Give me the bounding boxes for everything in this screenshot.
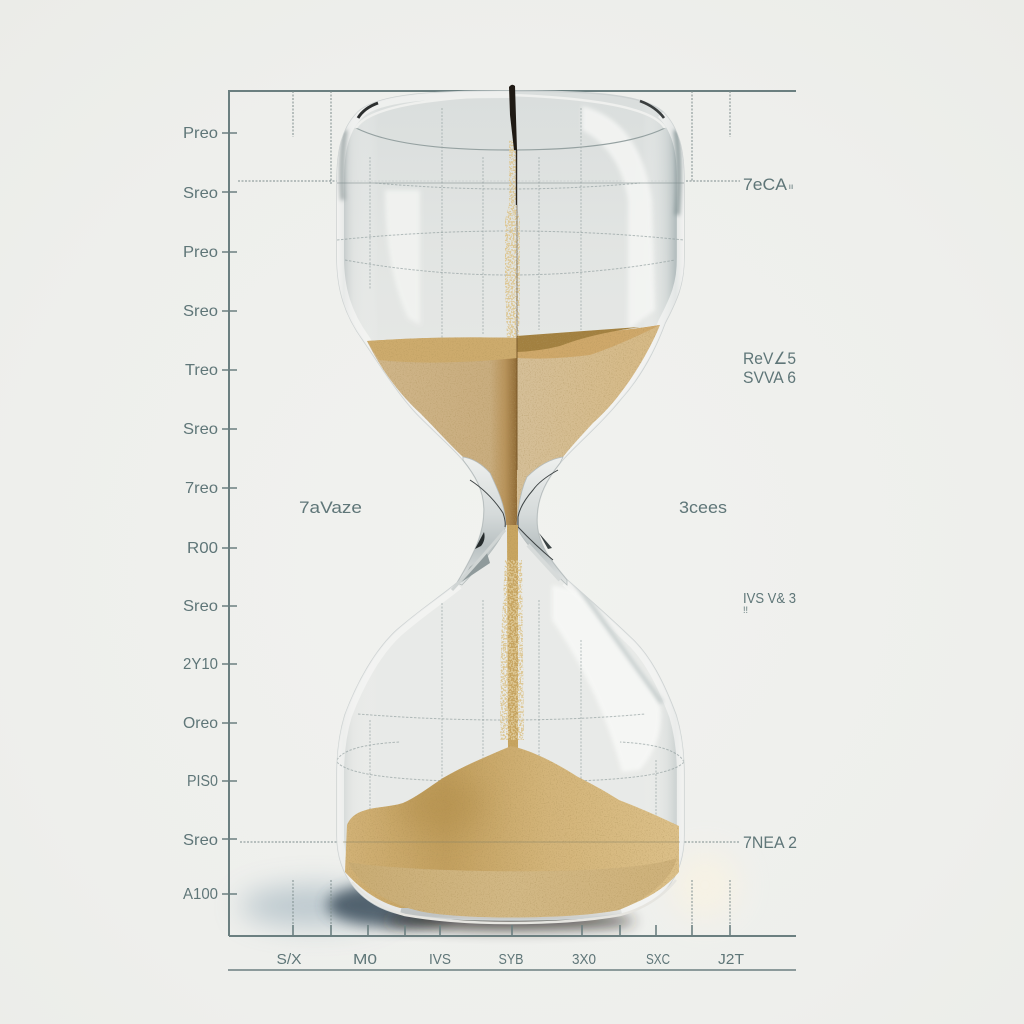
mid annotations: [299, 498, 727, 517]
y axis labels: Treo: [185, 362, 218, 379]
upper sand: [367, 325, 660, 525]
glass reflections and gridlines: [337, 91, 684, 920]
right side annotations: ReV∠5: [743, 349, 796, 368]
right side annotations: [743, 175, 797, 852]
x axis labels: SXC: [646, 951, 670, 968]
x axis labels: M0: [353, 951, 377, 968]
y axis labels: 2Y10: [183, 656, 218, 673]
mid annotations: 3cees: [679, 498, 727, 517]
x axis labels: J2T: [718, 951, 744, 968]
right side annotations: SVVA 6: [743, 368, 796, 387]
y axis labels: Sreo: [183, 598, 218, 615]
y axis labels: Sreo: [183, 185, 218, 202]
mid annotations: 7aVaze: [299, 498, 362, 517]
right side annotations: lll: [789, 185, 793, 191]
right side annotations: 7eCA: [743, 175, 788, 194]
y axis ticks: [222, 133, 730, 936]
hourglass: [337, 85, 684, 923]
dashed line over sand: [343, 841, 680, 843]
right side annotations: IVS V& 3: [743, 590, 796, 607]
falling sand particles upper: [505, 140, 520, 338]
lower sand pile: [345, 746, 679, 918]
falling sand particles lower: [500, 560, 524, 740]
x axis labels: [276, 951, 744, 968]
y axis labels: PIS0: [187, 773, 218, 790]
right side annotations: !!: [743, 605, 748, 615]
x axis labels: 3X0: [572, 951, 596, 968]
right side annotations: 7NEA 2: [743, 833, 797, 852]
y axis labels: [183, 125, 218, 903]
y axis labels: Preo: [183, 244, 218, 261]
cast shadow and warm glow: [240, 850, 740, 929]
y axis labels: R00: [187, 540, 218, 557]
x axis labels: IVS: [429, 951, 451, 968]
rim: [356, 95, 665, 150]
center divider: [509, 85, 517, 470]
y axis labels: Preo: [183, 125, 218, 142]
y axis labels: Sreo: [183, 303, 218, 320]
chart frame with axes: [228, 91, 796, 970]
glass base edge: [352, 880, 676, 923]
sand stream: [507, 525, 518, 748]
y axis labels: A100: [183, 886, 218, 903]
dashed guide lines outside glass: [238, 91, 740, 925]
neck glass: [452, 457, 567, 590]
y axis labels: Sreo: [183, 832, 218, 849]
x axis labels: SYB: [498, 951, 524, 968]
y axis labels: 7reo: [185, 480, 218, 497]
y axis labels: Sreo: [183, 421, 218, 438]
x axis labels: S/X: [276, 951, 302, 968]
glass body: [337, 91, 684, 920]
y axis labels: Oreo: [183, 715, 218, 732]
